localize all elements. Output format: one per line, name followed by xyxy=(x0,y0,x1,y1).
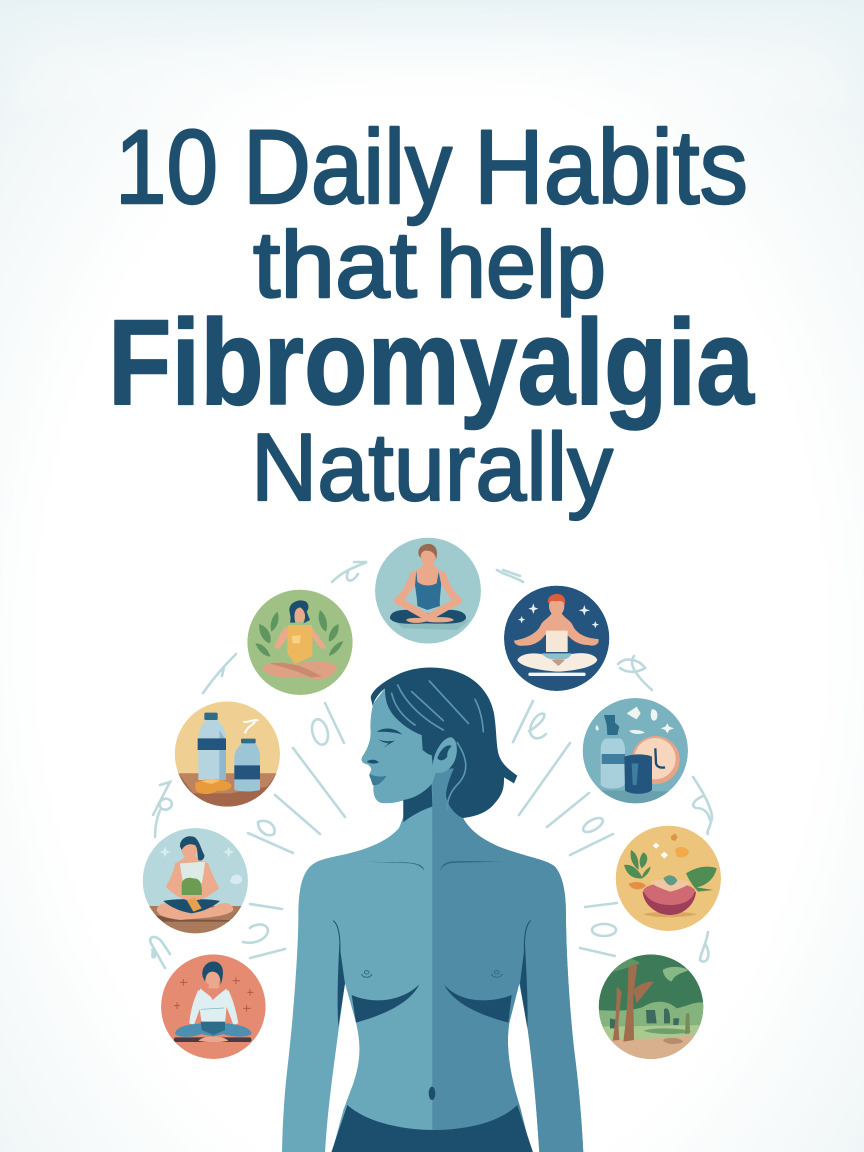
sparkles xyxy=(159,847,242,884)
mat xyxy=(528,673,586,676)
circle background xyxy=(161,954,266,1059)
title line 2 xyxy=(253,212,606,317)
ground xyxy=(149,906,242,934)
arms and shoulders xyxy=(514,613,599,646)
carrot xyxy=(628,882,646,889)
midground bushes xyxy=(597,1002,707,1030)
legs xyxy=(390,610,466,624)
title line 2: that xyxy=(253,212,417,317)
body line details xyxy=(333,921,531,950)
tree silhouettes xyxy=(610,1008,679,1028)
sparkles xyxy=(653,843,668,859)
habit circle: relaxation pose xyxy=(161,954,266,1059)
title line 1 xyxy=(115,109,748,226)
circle background xyxy=(583,698,688,803)
legs xyxy=(175,1023,252,1037)
face xyxy=(362,688,440,803)
hair xyxy=(418,544,437,560)
habit circle: healthy food xyxy=(616,826,721,931)
laurel leaves xyxy=(255,610,343,657)
small bottle xyxy=(234,743,260,791)
torso shadows xyxy=(338,943,528,1028)
neck xyxy=(398,760,432,830)
head xyxy=(549,596,564,616)
circle background xyxy=(504,586,609,691)
arms xyxy=(189,990,238,1025)
stars xyxy=(518,603,599,628)
torso and arms xyxy=(282,763,583,1152)
ear xyxy=(433,737,457,773)
sparkle xyxy=(243,720,258,733)
right leaves xyxy=(686,867,717,892)
white top xyxy=(546,631,568,652)
sparkles xyxy=(174,977,253,1012)
habit circle: hydration and meal xyxy=(583,698,688,803)
legs xyxy=(157,903,233,920)
habit circle: seated meditation top xyxy=(375,538,481,644)
circle background xyxy=(175,701,280,807)
head xyxy=(181,844,198,856)
title line 1: Habits xyxy=(474,109,748,226)
white pants xyxy=(517,653,597,672)
mat xyxy=(174,1037,251,1042)
circle background xyxy=(616,826,721,931)
table xyxy=(178,773,276,807)
mug xyxy=(624,754,652,794)
skirt xyxy=(163,899,220,913)
shoulders xyxy=(413,564,443,587)
head xyxy=(294,608,305,622)
circle background xyxy=(143,828,248,933)
title line 2: help xyxy=(436,212,606,317)
head xyxy=(420,550,436,564)
top xyxy=(287,625,313,664)
shorts xyxy=(542,653,572,660)
arms xyxy=(398,575,458,617)
large bottle xyxy=(198,720,226,780)
toppings xyxy=(650,879,691,892)
left leaves xyxy=(624,850,651,878)
eyebrow eye nostril xyxy=(367,728,402,764)
arms xyxy=(274,627,327,649)
body left half xyxy=(282,763,583,1152)
head xyxy=(362,668,517,830)
legs xyxy=(262,661,337,679)
herb bouquet xyxy=(182,878,202,895)
plate xyxy=(632,736,680,784)
oranges xyxy=(195,779,232,794)
shorts xyxy=(331,1105,533,1152)
title line 4: Naturally xyxy=(251,414,613,521)
head xyxy=(205,967,220,986)
circle background xyxy=(375,538,481,644)
circle background xyxy=(247,590,353,695)
utensil xyxy=(655,748,665,768)
foliage highlight xyxy=(663,967,688,982)
habit circle: forest walk xyxy=(597,954,707,1063)
habit circle: hydration bottles xyxy=(173,701,280,810)
torso and arms xyxy=(166,852,219,900)
title line 3: Fibromyalgia xyxy=(108,294,755,430)
blouse xyxy=(199,988,227,1023)
bowl xyxy=(643,892,696,915)
bottle xyxy=(601,738,625,789)
neck shadow xyxy=(403,784,432,822)
hair highlights xyxy=(392,681,483,810)
tank top xyxy=(415,571,441,610)
hair xyxy=(371,668,517,818)
habit circle: herbs meditation xyxy=(140,828,248,936)
hair xyxy=(202,962,223,985)
radiating lines and doodles xyxy=(150,562,712,968)
floating icons xyxy=(596,707,674,734)
body right half shading xyxy=(432,818,584,1152)
title line 1: 10 xyxy=(115,109,218,226)
citrus xyxy=(675,847,689,857)
hair xyxy=(548,594,565,605)
mouth xyxy=(369,774,387,785)
habit circle: leaves meditation xyxy=(247,590,353,695)
hair xyxy=(289,600,310,623)
central human figure xyxy=(282,668,583,1152)
hair xyxy=(180,836,204,860)
path xyxy=(603,1033,703,1063)
circle background xyxy=(599,954,703,1059)
lawn xyxy=(597,1025,707,1043)
habit circle: evening meditation xyxy=(504,586,609,691)
feet xyxy=(406,617,454,623)
title xyxy=(108,109,755,521)
tree trunks xyxy=(613,963,654,1042)
title line 1: Daily xyxy=(243,109,452,226)
